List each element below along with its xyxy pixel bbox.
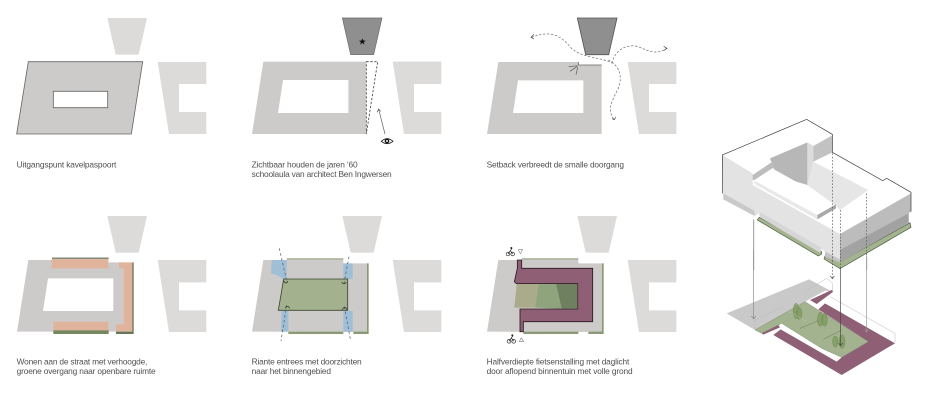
roof outline <box>722 119 911 212</box>
arrowheads <box>531 34 667 120</box>
caption: Zichtbaar houden de jaren ‘60 <box>252 159 358 169</box>
projection lines <box>751 250 869 346</box>
corner block <box>813 135 832 162</box>
caption line 2: door aflopend binnentuin met volle grond <box>487 366 633 376</box>
dashed sight lines <box>279 248 351 341</box>
grey plane <box>727 279 832 330</box>
faint outline of building footprint <box>755 278 895 343</box>
garden slope: mid <box>535 284 562 309</box>
green edge strips <box>287 258 369 334</box>
green garden <box>755 302 868 357</box>
isometric building volume <box>722 119 911 270</box>
orange homes: right <box>116 262 133 332</box>
roof courtyard floor <box>807 162 868 210</box>
right wall lower band <box>840 213 909 263</box>
panel: zichtbaar houden schoolaula <box>252 18 441 179</box>
highlighted school hall <box>577 18 617 55</box>
green strip: bottom <box>53 330 109 334</box>
context block: C shape <box>628 62 676 134</box>
lower storey corner <box>825 252 840 263</box>
trees <box>793 303 845 348</box>
blue entrances <box>271 260 353 332</box>
front-left facade <box>722 155 840 262</box>
right wall <box>840 193 911 261</box>
context block: C shape <box>393 62 441 134</box>
panel: halfverdiepte fietsenstalling <box>487 216 676 376</box>
green strip: right and bottom <box>116 262 134 334</box>
panel: riante entrees <box>252 216 441 376</box>
building mass <box>17 260 123 332</box>
purple small ramp <box>762 325 780 335</box>
panel: uitgangspunt kavelpaspoort <box>17 18 206 169</box>
inner block front <box>754 181 817 219</box>
caption: Halfverdiepte fietsenstalling met daglicht <box>487 356 630 366</box>
plot outline with courtyard <box>17 62 143 134</box>
context block: C shape <box>158 260 206 332</box>
context block: trapezoid <box>107 18 147 55</box>
caption: Setback verbreedt de smalle doorgang <box>487 159 624 169</box>
lower storey left <box>723 193 755 216</box>
purple bicycle parking <box>514 260 593 332</box>
green base <box>757 217 911 269</box>
inner wall <box>753 163 775 180</box>
arrow markers <box>284 281 347 310</box>
lower storey middle <box>760 212 821 253</box>
highlighted school hall <box>342 18 382 55</box>
courtyard dark wall <box>770 142 807 185</box>
context block: trapezoid <box>107 216 147 253</box>
green edge strips <box>522 258 604 334</box>
icon: cyclist top <box>506 247 514 256</box>
garden slope: light <box>514 284 539 308</box>
purple upper arm <box>810 290 833 304</box>
context block: C shape <box>158 62 206 134</box>
caption: Wonen aan de straat met verhoogde, <box>17 356 147 366</box>
caption line 2: schoolaula van architect Ben Ingwersen <box>252 169 392 179</box>
paving lines <box>800 320 842 339</box>
context block: trapezoid <box>342 216 382 253</box>
icon: cyclist bottom <box>507 335 515 343</box>
icon: eye <box>381 139 393 144</box>
context block: C shape <box>628 260 676 332</box>
inner block side <box>817 204 836 219</box>
orange homes: top <box>52 259 108 268</box>
panel: setback <box>487 18 676 169</box>
garden slope: dark <box>556 284 577 309</box>
caption line 2: groene overgang naar openbare ruimte <box>17 366 156 376</box>
context block: trapezoid <box>577 216 617 253</box>
central courtyard <box>278 279 348 310</box>
projection lines <box>754 153 867 270</box>
icon: star <box>359 38 366 45</box>
isometric ground floor plan <box>727 250 895 375</box>
arrows: setback marker <box>569 66 578 75</box>
caption line 2: naar het binnengebied <box>252 366 331 376</box>
caption: Uitgangspunt kavelpaspoort <box>17 159 117 169</box>
panel: wonen aan de straat <box>17 216 206 376</box>
icon: triangle up <box>519 338 524 342</box>
purple U shape <box>773 303 895 375</box>
courtyard light wall <box>807 142 813 185</box>
green strip: top <box>52 258 109 259</box>
setback line <box>578 62 602 65</box>
arrows: dashed routes <box>532 34 667 119</box>
building mass <box>252 259 368 332</box>
arrow: sight line <box>377 109 385 134</box>
building mass with setback <box>487 62 602 134</box>
building mass <box>252 62 366 134</box>
context block: C shape <box>393 260 441 332</box>
icon: triangle down <box>518 250 523 254</box>
caption: Riante entrees met doorzichten <box>252 356 362 366</box>
dashed removed wedge <box>366 62 378 134</box>
orange homes: bottom <box>53 322 108 330</box>
building mass <box>487 259 603 332</box>
